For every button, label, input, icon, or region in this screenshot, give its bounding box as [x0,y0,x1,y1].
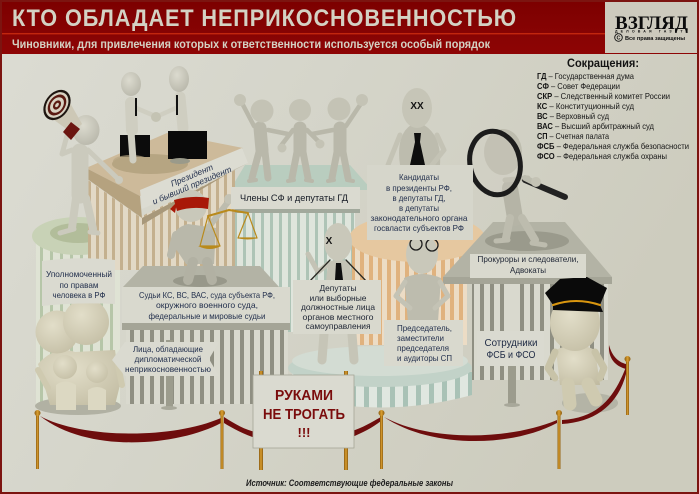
abbreviations legend: КС – Конституционный суд [537,101,634,111]
warning sign: !!! [298,425,310,440]
label: deputies: должностные лица [301,302,375,312]
label: deputies: Депутаты [320,283,356,293]
figure: candidate with tie: ХХ [410,101,424,112]
label: deputies: или выборные [310,293,367,303]
label: prosecutors: Прокуроры и следователи, [478,254,578,264]
label: audit chamber: председателя [397,343,449,353]
label: security services: Сотрудники [484,337,538,349]
pedestal: green round [32,217,124,405]
label: diplomats: дипломатической [134,354,202,364]
abbreviations legend: Сокращения: [567,56,639,70]
label: audit chamber: и аудиторы СП [397,353,452,363]
label: audit chamber [384,320,463,366]
label: candidates: в депутаты ГД, [392,193,446,203]
label: security services: ФСБ и ФСО [486,349,536,361]
warning sign: РУКАМИ [275,387,333,404]
pedestal: tan platform [86,133,248,270]
figure: candidate with tie [388,88,444,165]
abbreviations legend: ВС – Верховный суд [537,111,609,121]
label: deputies [293,280,381,334]
subtitle: Чиновники, для привлечения которых к ответственности используется особый порядок [12,39,490,51]
label: deputies: органов местного [302,312,374,322]
label: candidates: в депутаты [399,203,439,213]
figure: guard in black cap [545,277,618,413]
abbreviations legend: ВАС – Высший арбитражный суд [537,121,654,131]
pedestal: gray platform [443,222,612,407]
label: candidates: Кандидаты [399,172,439,182]
abbreviations legend: ФСО – Федеральная служба охраны [537,151,667,161]
pedestal: judges platform [122,266,290,410]
pedestal: pale round [288,346,472,408]
label: audit chamber: Председатель, [397,323,452,333]
abbreviations legend: СКР – Следственный комитет России [537,91,670,101]
logo: Все права защищены [625,36,685,42]
warning sign [253,375,354,448]
label: judges: Судьи КС, ВС, ВАС, суда субъекта РФ, [139,290,275,300]
label: diplomats [112,342,219,376]
label: federation council: Члены СФ и депутаты ГД [240,193,349,204]
label: president: Президент [169,162,214,189]
label: audit chamber: заместители [397,333,444,343]
source note: Источник: Соответствующие федеральные законы [246,478,453,488]
label: candidates: госвласти субъектов РФ [374,223,464,233]
label: federation council [231,187,360,209]
label: ombudsman: человека в РФ [52,290,106,300]
figure: man with megaphone [38,85,123,233]
logo: С [617,36,621,42]
abbreviations legend [537,56,689,161]
label: candidates: в президенты РФ, [386,183,452,193]
label: judges: окружного военного суда, [156,300,258,310]
rope posts [34,356,630,470]
figure: family [35,299,122,415]
label: ombudsman: Уполномоченный [46,269,112,279]
logo [605,1,698,53]
label: candidates [367,165,473,240]
pedestal: orange round [349,214,485,345]
label: prosecutors [470,254,586,278]
abbreviations legend: ГД – Государственная дума [537,71,634,81]
figure: blindfolded judge with scales [170,190,258,280]
figure: deputy with pointer sticks: Х [326,236,333,247]
abbreviations legend: СФ – Совет Федерации [537,81,620,91]
label: deputies: самоуправления [306,321,370,331]
figure: chairman with glasses [396,234,448,322]
label: security services [477,331,544,366]
logo: ДЕЛОВАЯ ГАЗЕТА [615,30,688,34]
pedestal: mint platform [195,165,372,332]
label: diplomats: Лица, обладающие [133,344,203,354]
abbreviations legend: ФСБ – Федеральная служба безопасности [537,141,689,151]
label: candidates: законодательного органа [370,213,468,223]
label: judges: федеральные и мировые судьи [148,311,266,321]
label: president [140,148,248,209]
figures: three standing people [234,94,368,181]
label: ombudsman [42,258,115,306]
figure: deputy with pointer sticks [308,223,368,360]
label: ombudsman: по правам [60,280,99,290]
label: prosecutors: Адвокаты [510,265,546,275]
header band [0,0,699,54]
rope segments [40,345,626,442]
warning sign: НЕ ТРОГАТЬ [263,406,345,423]
abbreviations legend: СП – Счетная палата [537,131,609,141]
label: president: и бывший президент [151,164,233,206]
title: КТО ОБЛАДАЕТ НЕПРИКОСНОВЕННОСТЬЮ [12,5,517,32]
logo: ВЗГЛЯД [615,13,688,34]
figures: handshake with briefcases [113,66,207,167]
label: diplomats: неприкосновенностью [125,364,211,374]
label: judges [122,287,290,323]
figure: man with magnifier [464,127,565,245]
